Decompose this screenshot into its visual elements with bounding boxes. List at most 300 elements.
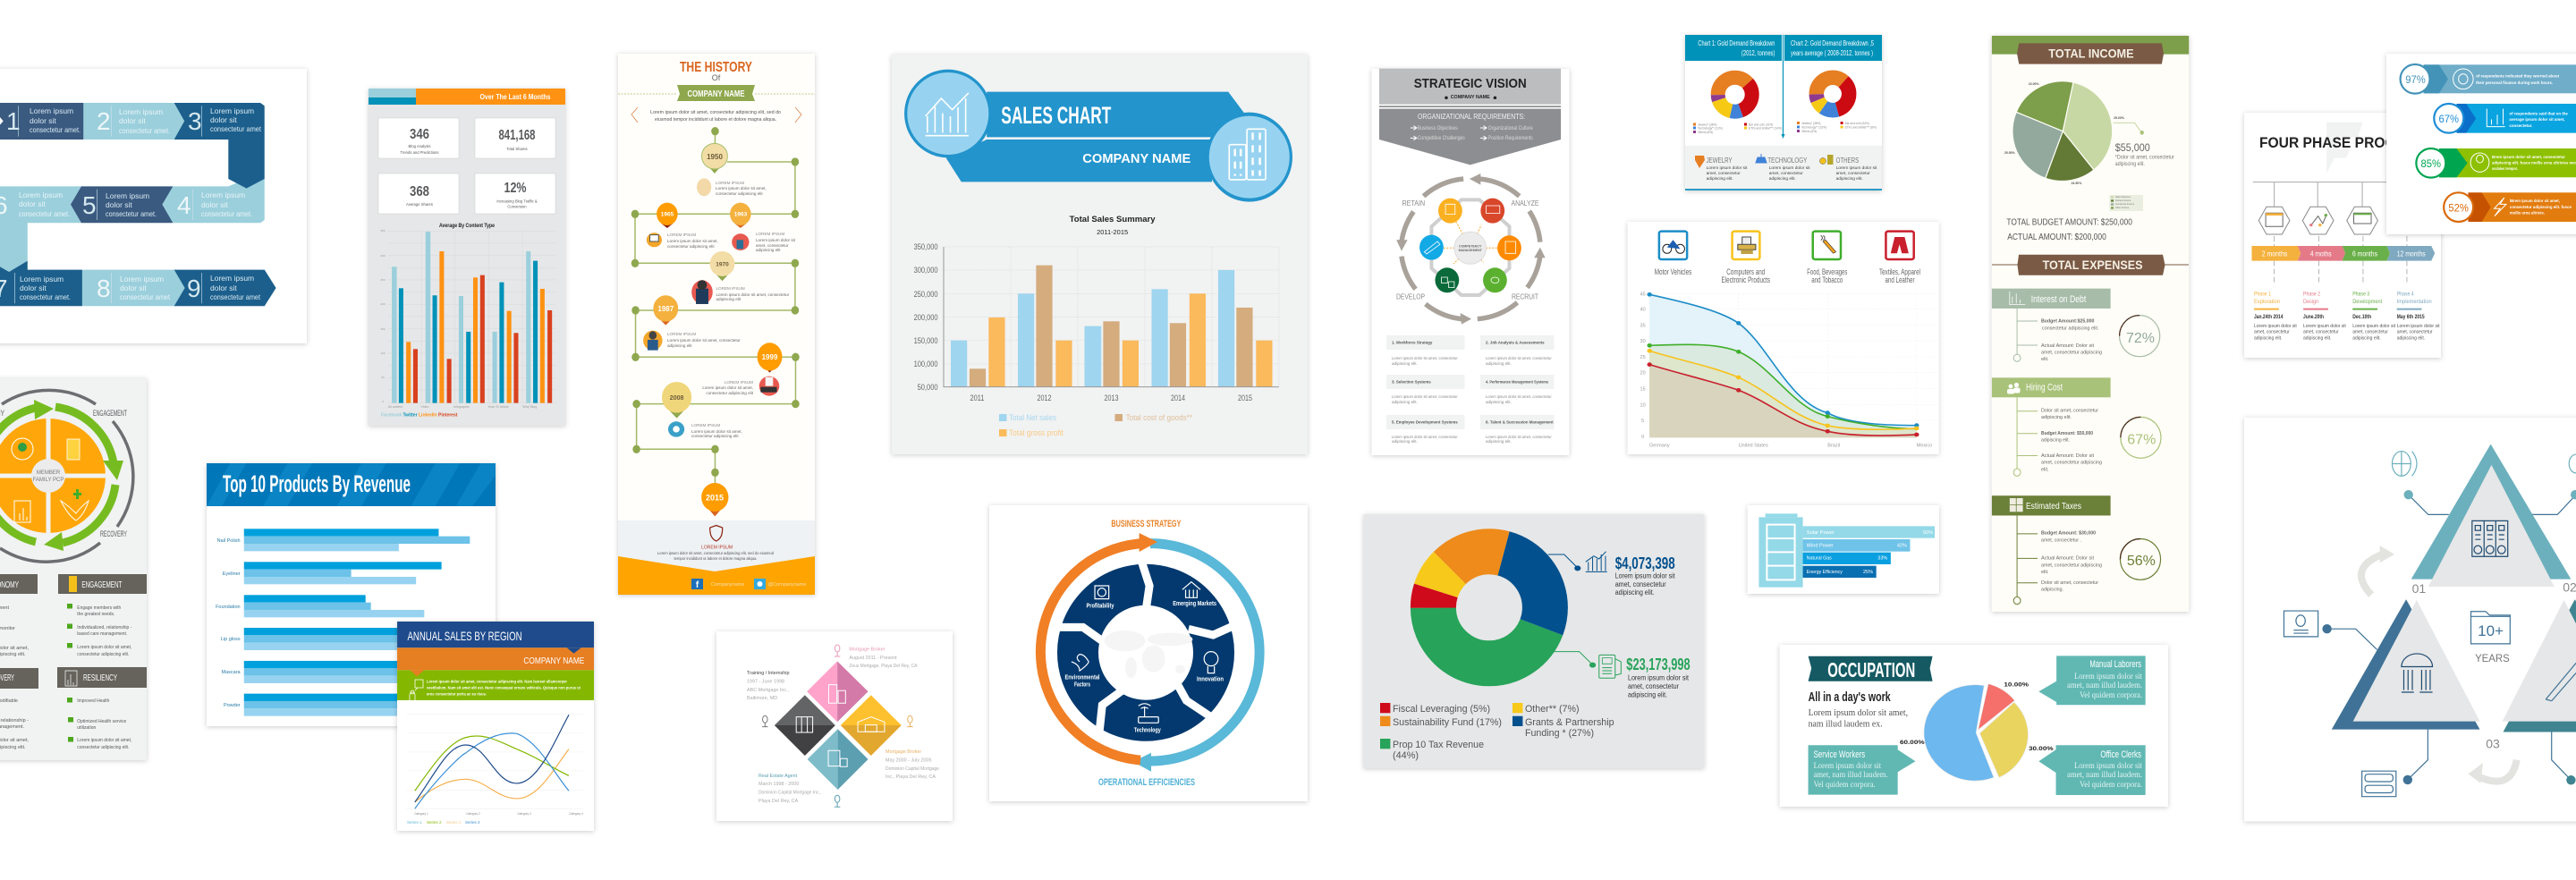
donut chart 2 — [1817, 78, 1849, 110]
bar chart: content type — [380, 229, 556, 409]
income notes: 22.00% — [2029, 82, 2040, 86]
header bar: Over The Last 6 Months — [479, 93, 551, 101]
phase columns: Lorem ipsum dolor sit — [2254, 324, 2297, 329]
panel: top 10 products bar chart — [207, 463, 496, 726]
watermark and heading: FOUR PHASE PROCESS — [2259, 134, 2423, 151]
step captions: dolor sit — [119, 116, 146, 125]
bar labels: Lip gloss — [221, 637, 241, 642]
career text blocks — [747, 647, 939, 804]
chart title: 2011-2015 — [1097, 230, 1128, 236]
axis labels: 5 — [1641, 419, 1644, 424]
history footer: f — [696, 580, 699, 590]
chart legend — [999, 413, 1192, 438]
step captions: Lorem ipsum — [120, 275, 164, 283]
income notes: 25.00% — [2114, 116, 2125, 120]
band text: consectetur adipiscing elit. fusce — [2510, 205, 2572, 210]
section: hiring cost: elit. — [2041, 467, 2049, 472]
title block: THE HISTORY — [680, 60, 752, 75]
section: interest on debt — [1992, 289, 2160, 362]
career text blocks: May 2000 - July 2005 — [886, 758, 932, 764]
timeline entries: consectetur adipiscing elit — [691, 434, 739, 438]
category notes: adipiscing elit. — [1836, 176, 1863, 182]
axis labels: 45 — [1640, 292, 1646, 297]
stat cards: Increasing Blog Traffic & — [496, 199, 538, 204]
phase columns: Lorem ipsum dolor sit — [2303, 324, 2346, 329]
axis labels and legend: Series 2 — [427, 820, 442, 825]
banner — [1809, 656, 1933, 681]
cycle labels: DEVELOP — [1396, 293, 1425, 300]
donut legend: Prop 10 Tax Revenue — [1393, 740, 1484, 750]
step captions: consectetur amet. — [20, 292, 71, 301]
phase columns: Development — [2352, 299, 2382, 305]
title block: eiusmod tempor incididunt ut labore et dolore magna aliqua. — [655, 117, 776, 123]
bullet lists — [0, 604, 132, 750]
header text: COMPANY NAME — [523, 656, 585, 666]
step captions: Lorem ipsum — [30, 106, 73, 115]
intro text — [1809, 690, 1908, 730]
donut legends: Technology** (15%) — [1801, 125, 1826, 129]
chart title: Total Sales Summary — [1070, 215, 1156, 224]
axis labels and legend: Series 4 — [465, 820, 480, 825]
section: hiring cost: Actual Amount: Dolor sit — [2041, 453, 2094, 459]
bar chart: content type: 100 — [380, 351, 386, 355]
bar labels: 25% — [1863, 570, 1873, 575]
bar chart: content type: 0 — [382, 400, 384, 403]
section: estimated taxes: adipiscing. — [2041, 588, 2063, 593]
donut legends: Bar and coin (34%) — [1845, 122, 1869, 125]
callout: green figure: Lorem ipsum dolor sit — [1628, 674, 1690, 681]
step captions: Lorem ipsum — [119, 107, 163, 116]
header text: ANNUAL SALES BY REGION — [408, 629, 522, 643]
bar chart: content type: Video — [421, 405, 428, 409]
bar chart: sales: 150,000 — [914, 336, 938, 345]
income notes: 24.50% — [2071, 182, 2082, 185]
competency descriptions: adipiscing elit. — [1486, 439, 1512, 444]
panel: revenue donut — [1364, 514, 1704, 768]
step captions: Lorem ipsum — [19, 190, 63, 199]
bar chart: content type: 50 — [381, 376, 385, 379]
career text blocks: Dominion Capital Mortgage Inc., — [758, 791, 821, 796]
ten years badge: 10+ — [2478, 622, 2504, 639]
step captions: dolor sit — [106, 200, 132, 209]
callout text: manual laborers — [2067, 659, 2142, 699]
income notes: Interest Income — [2115, 199, 2131, 202]
callout: green figure: adipiscing elit. — [1628, 690, 1667, 699]
axis labels: 35 — [1640, 323, 1646, 328]
bullet lists: the greatest needs. — [77, 612, 115, 617]
industry labels: Computers and — [1726, 267, 1765, 276]
donut legend: (44%) — [1393, 750, 1419, 761]
diamond blocks — [762, 645, 913, 807]
career text blocks: Mortgage Broker — [849, 647, 886, 653]
income notes: Investment Income — [2115, 203, 2135, 206]
callout: green figure — [1554, 652, 1690, 699]
bar chart: content type: All content — [388, 405, 402, 409]
header banner: Top 10 Products By Revenue — [223, 470, 411, 497]
donut legend: Fiscal Leveraging (5%) — [1393, 704, 1490, 715]
step captions: consectetur amet. — [19, 209, 70, 218]
category notes: amet, consectetur — [1707, 171, 1741, 176]
donut legends: Others (6%) — [1801, 130, 1817, 133]
step numbers: 01 — [2412, 581, 2426, 596]
phase columns: amet, consectetur — [2352, 330, 2388, 335]
cycle labels: RECRUIT — [1512, 293, 1538, 300]
timeline entries: LOREM IPSUM — [756, 232, 784, 236]
industry icons — [1659, 232, 1914, 259]
intro text: All in a day's work — [1809, 690, 1891, 705]
phase columns: adipiscing elit. — [2352, 335, 2381, 341]
phase columns: Phase 1 — [2254, 292, 2271, 297]
cycle labels: MANAGEMENT — [1459, 249, 1483, 252]
timeline entries: LOREM IPSUM — [667, 233, 696, 237]
heading: STRATEGIC VISION — [1414, 76, 1527, 91]
ten years badge: YEARS — [2475, 652, 2510, 664]
timeline entries: LOREM IPSUM — [667, 332, 696, 336]
bar chart: sales: 2014 — [1171, 393, 1185, 402]
phase columns: adipiscing elit. — [2397, 335, 2425, 341]
donut legends: ETFs and similar*** (14%) — [1749, 127, 1782, 131]
company name: COMPANY NAME — [1082, 152, 1191, 166]
phase columns: adipiscing elit. — [2254, 335, 2282, 341]
bar labels: 50% — [1923, 530, 1933, 536]
section: hiring cost: Budget Amount: $50,000 — [2041, 431, 2093, 436]
chart legend: Facebook — [381, 413, 402, 419]
panel: sales chart — [892, 55, 1308, 454]
callout: green figure: $23,173,998 — [1626, 656, 1690, 673]
section headers — [0, 574, 147, 689]
step captions: dolor sit — [210, 115, 237, 124]
chart title — [1070, 215, 1156, 236]
industry labels: and Tobacco — [1811, 275, 1843, 284]
career text blocks: March 1998 - 2000 — [758, 782, 799, 787]
history footer: tempor incididunt ut labore et dolore magna aliqua. — [674, 556, 757, 561]
axis labels: 30 — [1640, 339, 1646, 344]
wheel diagram — [0, 390, 133, 562]
cycle headings: BUSINESS STRATEGY — [1111, 519, 1182, 529]
chart legend: Pinterest — [438, 413, 458, 419]
triangles, connectors and icons — [2284, 444, 2576, 797]
callout text: service workers: Service Workers — [1814, 749, 1866, 760]
section: interest on debt: 72% — [2126, 331, 2155, 346]
income notes: Sales Revenue — [2115, 196, 2131, 199]
stat cards: Trends and Predictions — [401, 150, 438, 155]
band text: of respondents indicated they worried about — [2476, 73, 2559, 79]
section: interest on debt: elit. — [2041, 357, 2049, 362]
wheel diagram: FAMILY PCP — [33, 478, 64, 483]
history footer: Companyname — [711, 582, 744, 588]
section: interest on debt: amet, consectetur adipiscing — [2041, 351, 2102, 356]
title block: Of — [712, 73, 721, 82]
wheel diagram: MEMBER — [37, 470, 61, 476]
phase columns: amet, consectetur — [2254, 330, 2290, 335]
band text: mollis urna ultricie. — [2510, 211, 2545, 216]
section: hiring cost: Hiring Cost — [2026, 383, 2063, 393]
donut legends: Technology** (11%) — [1698, 127, 1723, 131]
title block — [618, 60, 815, 123]
panel: survey percentages — [2386, 54, 2576, 234]
bar chart: sales: 350,000 — [914, 242, 938, 251]
bullet lists: consectetur adipiscing elit. — [77, 745, 130, 750]
band text — [2476, 73, 2576, 216]
timeline entries: Lorem ipsum dolor sit amet, — [716, 186, 767, 190]
callout text: office clerks: Office Clerks — [2100, 749, 2141, 760]
axis labels and legend: Category 3 — [517, 812, 531, 816]
step numbers: 3 — [188, 107, 202, 135]
segment labels: Innovation — [1197, 676, 1224, 683]
bullet lists: based care management. — [77, 631, 128, 637]
section headers: ENGAGEMENT — [81, 580, 122, 590]
bar chart: content type: 'How To' Article — [487, 405, 509, 409]
callout text: service workers: amet, nam illud laudem. — [1814, 770, 1888, 779]
timeline entries — [667, 181, 796, 438]
bar chart: content type: Infographic — [453, 405, 470, 409]
timeline entries: consectetur adipiscing elit — [716, 191, 763, 196]
donut legends: Jewelry* (38%) — [1801, 122, 1820, 125]
stat cards: 841,168 — [499, 128, 536, 143]
intro text: Lorem ipsum dolor sit amet, — [1809, 708, 1908, 718]
step numbers: 03 — [2486, 737, 2500, 751]
career text blocks: Dominion Capital Mortgage — [886, 766, 939, 772]
panel: occupation pie — [1780, 645, 2168, 807]
career text blocks: Real Estate Agent — [758, 774, 798, 779]
timeline entries: LOREM IPSUM — [691, 423, 720, 427]
axis labels: United States — [1739, 444, 1768, 449]
donut legend: Other** (7%) — [1525, 704, 1580, 715]
band text: average ipsum dolor sit amet, — [2509, 117, 2565, 123]
timeline entries: Lorem ipsum dolor sit amet, — [702, 385, 753, 390]
bar labels: Energy Efficiency — [1807, 570, 1843, 575]
step numbers: 2 — [97, 107, 111, 135]
career text blocks: Playa Del Rey, CA — [758, 799, 799, 804]
competency descriptions: Lorem ipsum dolor sit amet, consectetur — [1392, 435, 1458, 439]
step captions: dolor sit — [210, 283, 237, 292]
phase columns: adipiscing elit. — [2303, 335, 2331, 341]
requirements list: Position Requirements — [1488, 136, 1533, 141]
income notes: ACTUAL AMOUNT: $200,000 — [2007, 233, 2106, 242]
battery and bars — [1758, 513, 1935, 588]
timeline entries: Lorem ipsum dolor sit amet, — [667, 239, 718, 243]
income notes: *Dolor sit amet, consectetur — [2115, 156, 2174, 161]
chart legend — [381, 413, 458, 419]
header text: vestibulum. Nam sit amet elit est. Nunc consequat ornare vehicula. Quisque non purus ut — [427, 685, 581, 690]
phase columns: amet, consectetur — [2397, 330, 2433, 335]
header and footer bands: Chart 1: Gold Demand Breakdown — [1698, 39, 1775, 47]
band text: consectetur. — [2509, 123, 2532, 129]
panel: energy battery bars — [1748, 505, 1939, 594]
history footer: @Companyname — [767, 582, 806, 588]
heading: COMPANY NAME — [1451, 95, 1490, 100]
competency descriptions: 4. Performance Management Systems — [1486, 379, 1548, 385]
header and footer bands: years average ( 2008-2012, tonnes ) — [1791, 49, 1873, 57]
phase columns: Jan.24th 2014 — [2254, 315, 2284, 320]
category notes: Lorem ipsum dolor sit — [1707, 165, 1748, 171]
section: hiring cost: adipiscing elit. — [2041, 415, 2072, 420]
axis labels and legend: Series 3 — [446, 820, 462, 825]
bar chart: sales: 100,000 — [914, 360, 938, 368]
cycle labels — [1396, 199, 1538, 300]
requirements list: Competitive Challenges — [1418, 136, 1465, 141]
step captions — [19, 106, 262, 301]
bar chart: content type: 200 — [380, 302, 386, 306]
timeline entries: consectetur adipiscing elit — [706, 391, 754, 395]
competency descriptions: Lorem ipsum dolor sit amet, consectetur — [1486, 356, 1552, 360]
banner heading: SALES CHART — [1001, 102, 1112, 129]
phase columns: Phase 4 — [2397, 292, 2414, 297]
section: estimated taxes: Dolor sit amet, consectetur — [2041, 580, 2098, 586]
step numbers — [2412, 580, 2576, 751]
chart legend: LinkedIn — [419, 413, 437, 419]
phase columns: Phase 2 — [2303, 292, 2320, 297]
career text blocks: Baltimore, MD — [747, 696, 777, 701]
panel: diamond career path — [716, 631, 953, 821]
step numbers: 9 — [187, 275, 201, 302]
step captions: consectetur amet — [120, 292, 171, 301]
axis labels and legend: Category 4 — [569, 812, 583, 816]
bar chart: sales: 2011 — [970, 393, 984, 402]
percentage values — [2405, 73, 2469, 215]
category notes: amet, consectetur — [1836, 171, 1870, 176]
panel: company history timeline — [618, 54, 815, 595]
bar chart: sales — [914, 242, 1279, 402]
callout text: manual laborers: amet, nam illud laudem. — [2067, 681, 2142, 690]
duration labels: 4 moths — [2310, 250, 2332, 258]
line chart curves — [407, 715, 583, 808]
phase columns: May 6th 2015 — [2397, 315, 2425, 320]
step captions: consectetur amet — [210, 124, 262, 133]
callout text: service workers: Lorem ipsum dolor sit — [1814, 761, 1882, 770]
section: estimated taxes: amet, consectetur . — [2041, 538, 2081, 544]
segment labels: Profitability — [1086, 603, 1114, 610]
phase columns — [2254, 292, 2440, 341]
income notes: Other Income — [2115, 207, 2130, 209]
axis labels and legend: Category 1 — [414, 812, 428, 816]
bullet lists: Lorem ipsum dolor sit amet, — [77, 645, 132, 650]
stat cards: 368 — [410, 184, 429, 199]
axis labels: 25 — [1640, 355, 1646, 360]
year labels — [657, 153, 778, 503]
career text blocks: ABC Mortgage Inc., — [747, 688, 790, 693]
step numbers: 4 — [177, 191, 191, 219]
phase columns: June.20th — [2303, 315, 2324, 320]
chart legend: Total gross profit — [1009, 428, 1063, 438]
panel: blog statistics dashboard — [369, 89, 565, 426]
bar chart: content type: 300 — [380, 254, 386, 258]
bar chart: sales: 300,000 — [914, 266, 938, 275]
donut legend: Grants & Partnership — [1525, 717, 1614, 728]
panel: four phase process — [2244, 113, 2441, 358]
competency descriptions: 2. Job Analysis & Assessments — [1486, 340, 1545, 345]
header bar — [369, 89, 565, 105]
year labels: 1970 — [716, 261, 729, 268]
watermark and heading — [2259, 123, 2423, 173]
income notes: 25.50% — [2004, 151, 2016, 155]
section: hiring cost — [1992, 377, 2161, 476]
section: estimated taxes: amet, consectetur adipiscing — [2041, 563, 2102, 568]
section: estimated taxes: Budget Amount: $30,000 — [2041, 531, 2096, 537]
header banner — [207, 463, 496, 506]
panel: annual sales line chart — [397, 622, 594, 831]
phase columns: Phase 3 — [2352, 292, 2370, 297]
axis labels: 20 — [1640, 371, 1646, 377]
section: interest on debt: consectetur adipiscing elit. — [2042, 326, 2099, 331]
banner — [904, 70, 1292, 202]
area line chart — [1647, 292, 1939, 437]
year labels: 1965 — [661, 211, 674, 218]
stat cards: Average Shares — [406, 202, 433, 207]
step captions: dolor sit — [19, 199, 46, 208]
category notes: adipiscing elit. — [1769, 176, 1796, 182]
header and footer bands — [1685, 35, 1882, 190]
callout text: office clerks: Vel quidem corpora. — [2080, 780, 2142, 789]
step captions: consectetur amet. — [106, 209, 157, 218]
segment labels: Emerging Markets — [1173, 601, 1216, 607]
section: estimated taxes: Actual Amount: Dolor sit — [2041, 556, 2094, 562]
history footer: Lorem ipsum dolor sit amet, consectetur adipiscing elit, sed do eiusmod — [657, 551, 774, 555]
timeline entries: Lorem ipsum dolor sit amet, — [691, 429, 742, 434]
timeline entries: LOREM IPSUM — [716, 181, 744, 185]
cycle labels: RETAIN — [1402, 199, 1425, 207]
industry labels: Food, Beverages — [1807, 267, 1848, 276]
percentage values: 52% — [2448, 202, 2469, 215]
pie percentages: 10.00% — [2004, 681, 2029, 689]
segment labels: Factors — [1074, 681, 1090, 689]
ring labels — [0, 409, 127, 538]
axis labels — [1640, 292, 1932, 449]
competency descriptions: adipiscing elit. — [1486, 361, 1512, 366]
duration labels — [2262, 250, 2426, 258]
panel: total income and expenses — [1992, 36, 2189, 612]
category notes: Lorem ipsum dolor sit — [1836, 165, 1877, 171]
competency cycle — [1396, 173, 1546, 325]
phase columns: Design — [2303, 299, 2318, 305]
band text: sodales tempor. — [2492, 166, 2518, 172]
timeline entries: Lorem ipsum dolor sit amet, consectetur — [667, 338, 741, 343]
header and footer bands: Chart 2: Gold Demand Breakdown ,5 — [1791, 39, 1874, 47]
band text: lBrem ipsum dolor sit amet, — [2510, 199, 2560, 204]
section: hiring cost: adipiscing elit. — [2041, 437, 2070, 443]
bullet lists: Engage members with — [77, 605, 121, 611]
cycle labels: COMPETENCY — [1459, 245, 1482, 249]
expenses ribbon — [1992, 255, 2189, 275]
percentage values: 97% — [2405, 73, 2426, 86]
outer ring arrows — [1040, 533, 1259, 772]
bullet lists: Individualized, relationship - — [77, 625, 131, 630]
bar labels — [1807, 530, 1933, 575]
competency descriptions: 3. Selection Systems — [1392, 379, 1431, 385]
step captions: Lorem ipsum — [210, 106, 254, 115]
career text blocks: Zeus Mortgage, Playa Del Rey, CA — [849, 664, 918, 669]
cycle labels: ANALYZE — [1512, 199, 1538, 207]
step numbers: 8 — [97, 275, 111, 302]
income notes: adipiscing elit. — [2115, 162, 2145, 167]
bar chart: sales: 200,000 — [914, 313, 938, 322]
chart legend: Total cost of goods** — [1126, 413, 1192, 423]
donut legends: Others (6%) — [1698, 131, 1713, 134]
duration labels: 2 months — [2262, 250, 2287, 258]
donut chart — [1433, 552, 1545, 664]
category notes: JEWELRY — [1707, 157, 1733, 165]
callout: blue figure: adipiscing elit. — [1615, 588, 1655, 597]
band text: Brem ipsum dolor sit amet, consectetur — [2492, 155, 2565, 160]
step captions: consectetur amet. — [201, 209, 252, 218]
timeline portrait icons — [643, 178, 779, 437]
step captions: Lorem ipsum — [20, 275, 64, 283]
section: interest on debt: Budget Amount:$25,000 — [2041, 318, 2094, 324]
step captions: dolor sit — [201, 200, 228, 209]
arrow ribbon shapes — [0, 103, 276, 306]
section: interest on debt: Interest on Debt — [2031, 294, 2086, 305]
competency descriptions: adipiscing elit. — [1392, 439, 1418, 444]
